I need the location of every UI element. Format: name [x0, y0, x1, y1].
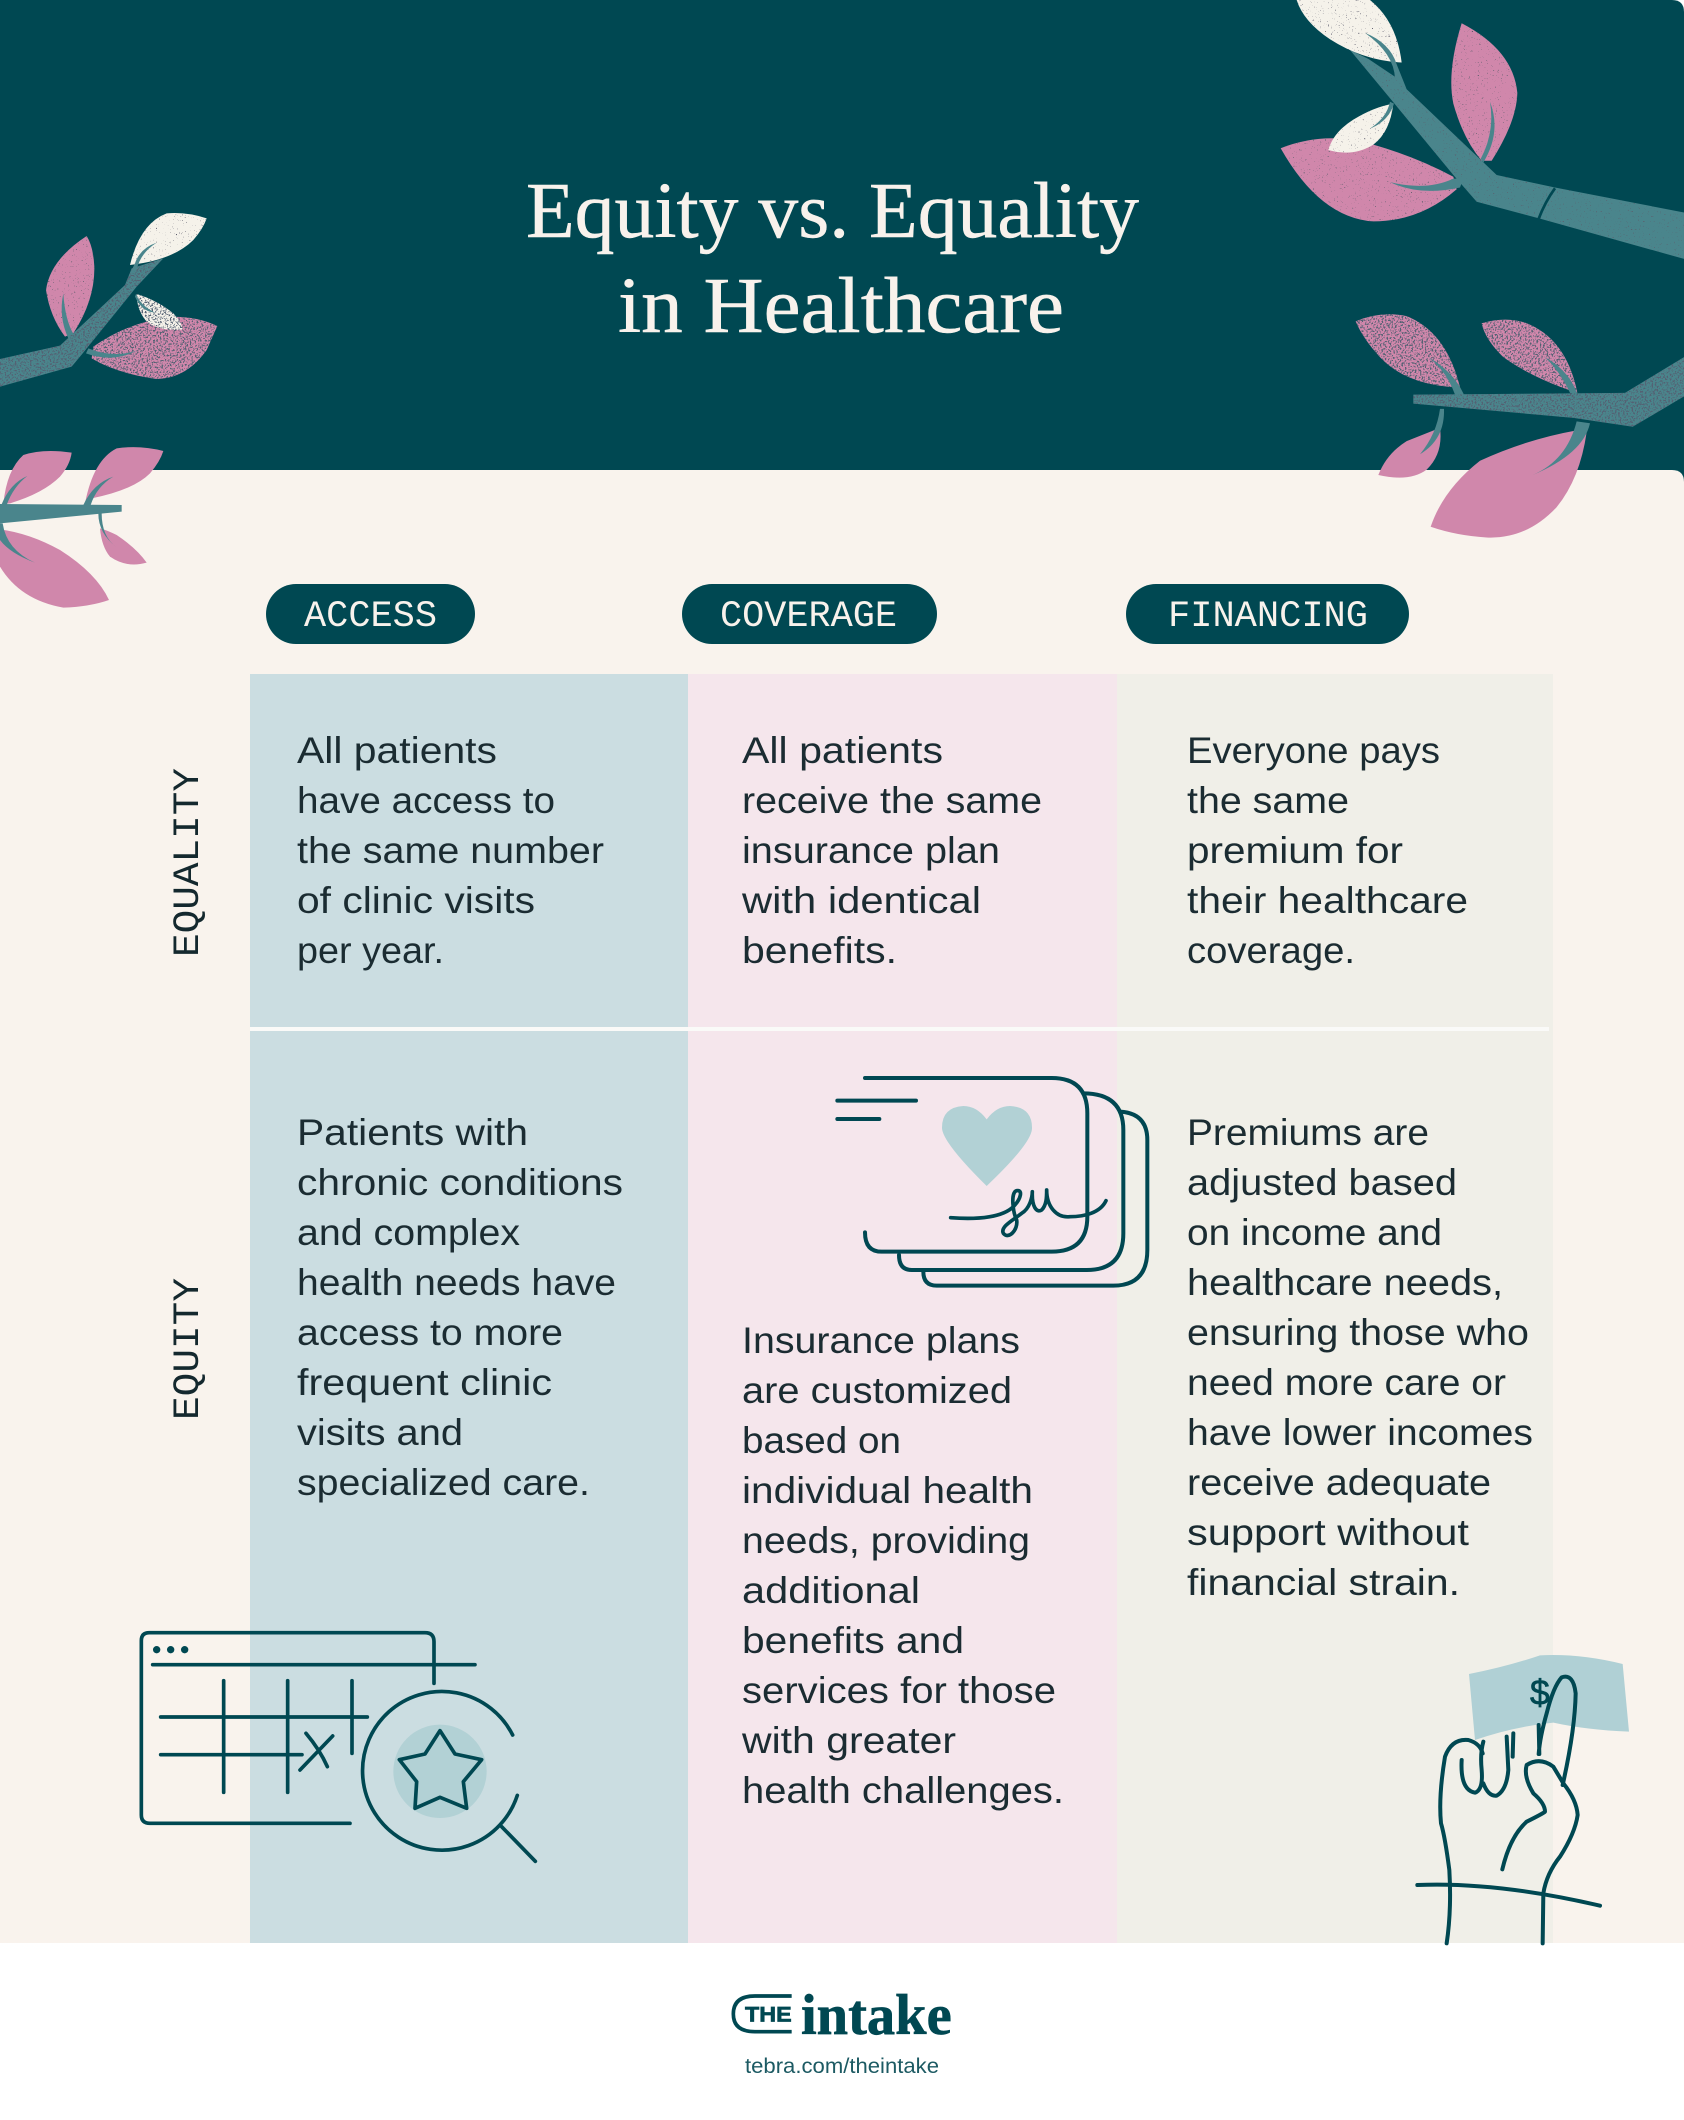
text: equality coverage: All patients	[742, 730, 943, 771]
leaf: small white	[1328, 104, 1393, 153]
text: equity coverage: health challenges.	[742, 1770, 1064, 1811]
text: equity access: frequent clinic	[297, 1362, 552, 1403]
footer url: tebra.com/theintake	[745, 2055, 939, 2078]
text: equity coverage: based on	[742, 1420, 901, 1461]
illustration: lower right branch	[1356, 314, 1684, 538]
logo: the intake	[733, 1984, 952, 2047]
text: equality access	[297, 730, 604, 971]
leaf: large pink	[0, 529, 109, 608]
title: Equity vs. Equality	[526, 168, 1139, 255]
leaf: small pink	[100, 528, 147, 565]
header band	[0, 0, 1684, 490]
leaf: pink upper	[46, 236, 94, 337]
text: equity financing	[1187, 1112, 1533, 1603]
text: equity access: chronic conditions	[297, 1162, 623, 1203]
text: equity financing: receive adequate	[1187, 1462, 1491, 1503]
text: equality access: per year.	[297, 930, 444, 971]
text: equality coverage: insurance plan	[742, 830, 1000, 871]
icon: insurance cards with heart	[837, 1078, 1147, 1286]
icon: hand holding dollar bill	[1417, 1655, 1629, 1943]
leaf: dense pink right	[1482, 320, 1577, 393]
text: equality financing: coverage.	[1187, 930, 1355, 971]
leaf: top white	[1297, 0, 1402, 62]
illustration: left lower branch	[0, 447, 163, 608]
logo: the intake: THE	[745, 2004, 792, 2027]
text: equality financing: Everyone pays	[1187, 730, 1440, 771]
pill: coverage: COVERAGE	[720, 596, 897, 638]
pill: access: ACCESS	[304, 596, 437, 638]
body panel	[0, 470, 1684, 1943]
leaf: small pink	[1378, 428, 1441, 478]
text: equity financing: adjusted based	[1187, 1162, 1457, 1203]
leaf: top white	[130, 213, 207, 265]
pill: financing: FINANCING	[1168, 596, 1368, 638]
text: equity coverage: Insurance plans	[742, 1320, 1020, 1361]
text: equity financing: on income and	[1187, 1212, 1442, 1253]
leaf: large pink	[1431, 430, 1587, 538]
text: equity coverage: services for those	[742, 1670, 1056, 1711]
branch	[0, 504, 122, 523]
illustration: top right branch	[1281, 0, 1684, 259]
pill: access	[266, 584, 475, 644]
text: equity coverage: needs, providing	[742, 1520, 1030, 1561]
text: equity access: and complex	[297, 1212, 521, 1253]
illustration: left upper branch	[0, 213, 217, 387]
text: equity coverage: additional	[742, 1570, 920, 1611]
text: equality financing: the same	[1187, 780, 1349, 821]
title	[526, 168, 1139, 350]
column: coverage	[688, 674, 1117, 1943]
pill: coverage	[682, 584, 937, 644]
branch	[1413, 357, 1684, 427]
text: equity access	[297, 1112, 623, 1503]
column: financing	[1117, 674, 1553, 1943]
text: equity financing: support without	[1187, 1512, 1470, 1553]
leaf: dense pink left	[1356, 314, 1460, 387]
text: equity coverage: benefits and	[742, 1620, 964, 1661]
text: equality coverage	[741, 730, 1042, 971]
text: equity financing: need more care or	[1187, 1362, 1506, 1403]
text: equity coverage: are customized	[742, 1370, 1012, 1411]
text: equity financing: financial strain.	[1187, 1562, 1460, 1603]
pill: financing	[1126, 584, 1409, 644]
row label: equality: EQUALITY	[168, 768, 210, 957]
column: access	[250, 674, 688, 1943]
branch	[0, 258, 163, 387]
text: equity financing: have lower incomes	[1187, 1412, 1533, 1453]
text: equity access: Patients with	[297, 1112, 528, 1153]
text: equality financing: their healthcare	[1187, 880, 1468, 921]
leaf: pink left	[3, 451, 72, 504]
text: equity financing: ensuring those who	[1187, 1312, 1529, 1353]
leaf: pink lower	[92, 317, 217, 379]
text: equity access: health needs have	[297, 1262, 616, 1303]
text: equality financing	[1187, 730, 1468, 971]
leaf: pink middle	[85, 447, 163, 503]
text: equity coverage: with greater	[741, 1720, 956, 1761]
text: equity coverage: individual health	[742, 1470, 1033, 1511]
text: equity financing: healthcare needs,	[1187, 1262, 1503, 1303]
leaf: large pink left	[1281, 138, 1457, 221]
text: equity financing: Premiums are	[1187, 1112, 1429, 1153]
icon: calendar with magnifying glass and star	[141, 1633, 535, 1861]
text: equality coverage: receive the same	[742, 780, 1042, 821]
text: equality access: have access to	[297, 780, 555, 821]
text: equity access: specialized care.	[297, 1462, 590, 1503]
text: equity access: visits and	[297, 1412, 463, 1453]
text: equality coverage: with identical	[741, 880, 981, 921]
text: equality coverage: benefits.	[742, 930, 897, 971]
text: equality access: All patients	[297, 730, 497, 771]
leaf: small white	[137, 294, 183, 330]
icon: hand holding dollar bill: $	[1530, 1674, 1550, 1713]
title: in Healthcare	[618, 263, 1064, 350]
text: equity access: access to more	[297, 1312, 563, 1353]
text: equity coverage	[741, 1320, 1064, 1811]
row label: equity: EQUITY	[168, 1278, 210, 1420]
text: equality access: the same number	[297, 830, 604, 871]
text: equality financing: premium for	[1187, 830, 1403, 871]
text: equality access: of clinic visits	[297, 880, 535, 921]
logo: the intake: intake	[801, 1984, 952, 2047]
branch	[1350, 50, 1684, 259]
leaf: large pink right	[1451, 23, 1517, 161]
